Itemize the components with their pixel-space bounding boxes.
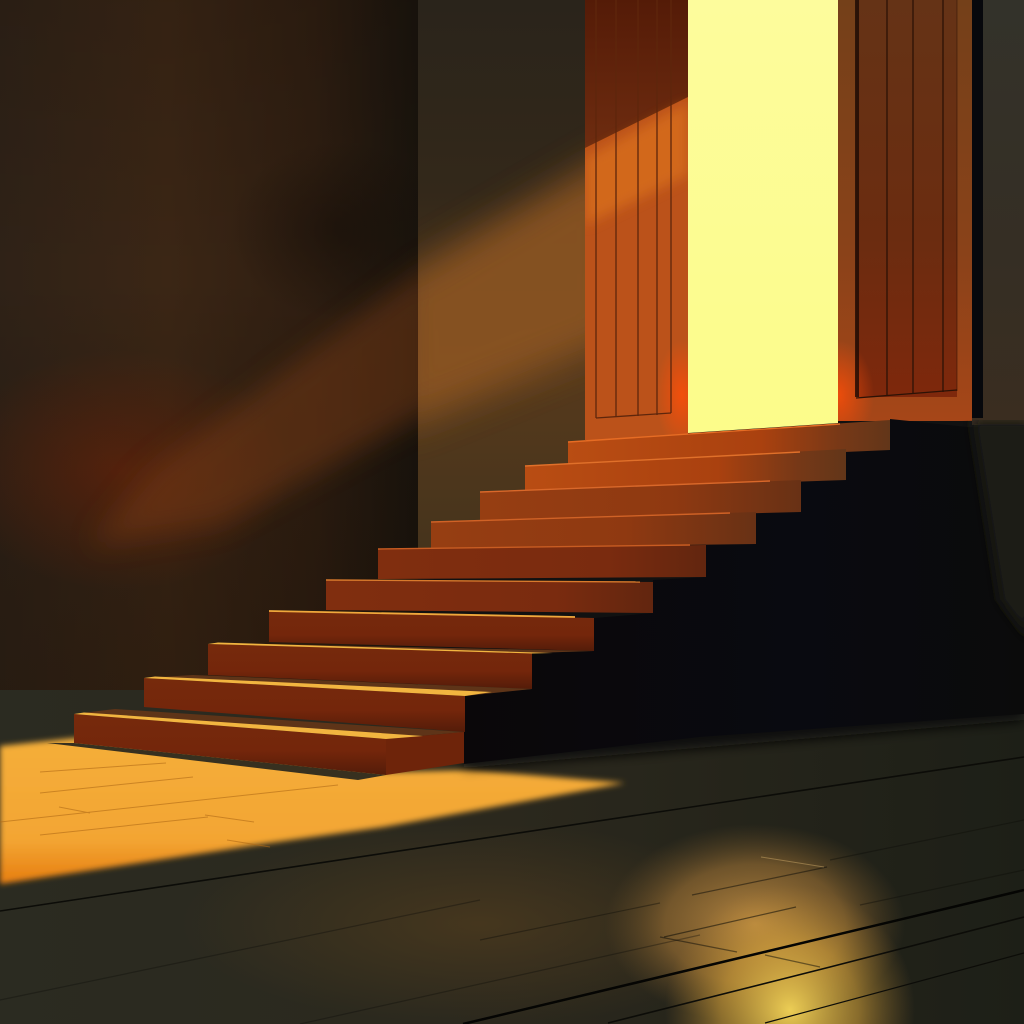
step 8 xyxy=(480,480,801,520)
shadow under stair mass on floor xyxy=(464,700,1024,768)
left wall xyxy=(0,0,450,690)
glowing opening xyxy=(688,0,838,433)
beam highlight on left door xyxy=(585,103,688,225)
left door xyxy=(585,0,688,440)
step 2 xyxy=(144,675,532,732)
floor xyxy=(0,680,1024,1024)
step 4 xyxy=(269,611,594,651)
stair cast shadow on floor xyxy=(47,743,386,780)
floor tone beside stair mass xyxy=(972,420,1024,640)
light beam on left wall xyxy=(90,255,440,545)
right door xyxy=(838,0,972,421)
step 10 xyxy=(568,420,890,464)
step 3 xyxy=(208,642,594,689)
stairs xyxy=(74,420,890,775)
right wall xyxy=(972,0,1024,425)
dark understair mass xyxy=(464,419,1024,764)
step 6 xyxy=(378,545,706,579)
step 5 xyxy=(326,580,653,613)
orange floor light patch xyxy=(0,738,625,884)
step 1 xyxy=(74,709,464,775)
step 7 xyxy=(431,512,756,548)
step 9 xyxy=(525,449,846,491)
back wall xyxy=(418,0,585,548)
light beam on back wall xyxy=(418,147,585,437)
